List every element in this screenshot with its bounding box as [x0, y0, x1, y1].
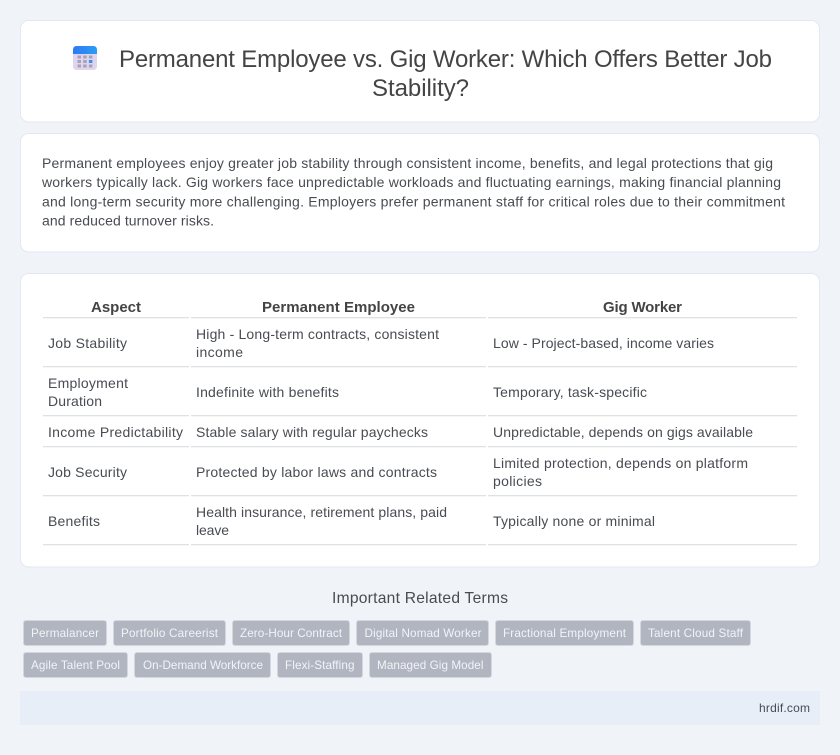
row: job security: Protected by labor laws and contracts	[196, 464, 437, 480]
tags: related terms: Digital Nomad Worker	[364, 627, 482, 640]
tags: related terms: On-Demand Workforce	[143, 659, 263, 672]
row: employment duration	[48, 375, 647, 409]
row: income predictability	[48, 424, 753, 440]
row: employment duration: Duration	[48, 393, 102, 409]
text block: introduction: workers typically lack. Gig workers face unpredictable workloads and fluctuating earnings, making financial planning	[41, 174, 781, 190]
tags: related terms: Fractional Employment	[503, 627, 627, 640]
row: job stability: Job Stability	[48, 335, 127, 351]
table header	[91, 299, 682, 316]
row: employment duration: Indefinite with benefits	[196, 384, 339, 400]
tags: related terms: Talent Cloud Staff	[648, 627, 744, 640]
row: benefits	[48, 504, 655, 538]
row: job stability: income	[196, 344, 243, 360]
table header: Aspect	[91, 299, 141, 316]
row: job stability: Low - Project-based, income varies	[493, 335, 714, 351]
row: benefits: Health insurance, retirement plans, paid	[196, 504, 447, 520]
panel: comparison table	[20, 274, 820, 567]
heading: important related terms: Important Related Terms	[332, 590, 508, 607]
tags: related terms: Agile Talent Pool	[31, 659, 120, 672]
text block: introduction	[41, 155, 785, 228]
text block: introduction: Permanent employees enjoy greater job stability through consistent income, benefits, and legal protections that gig	[42, 155, 773, 171]
table header: Gig Worker	[603, 299, 682, 316]
row: income predictability: Stable salary with regular paychecks	[196, 424, 428, 440]
row: job security: Limited protection, depends on platform	[493, 455, 748, 471]
title	[119, 46, 772, 102]
text block: introduction: and reduced turnover risks.	[42, 212, 214, 228]
panel: introduction	[20, 134, 820, 252]
text block: introduction: and long-term security more challenging. Employers prefer permanent staff for critical roles due to their commitment	[42, 194, 785, 210]
row: benefits: leave	[196, 522, 229, 538]
row: job stability: High - Long-term contracts, consistent	[196, 326, 439, 342]
row: job security	[48, 455, 748, 489]
icon: calendar	[73, 46, 97, 70]
tags: related terms: Managed Gig Model	[377, 659, 484, 672]
row: income predictability: Income Predictability	[48, 424, 183, 440]
row: job stability	[48, 326, 714, 360]
footer: hrdif.com	[759, 701, 810, 715]
row: income predictability: Unpredictable, depends on gigs available	[493, 424, 753, 440]
title: Stability?	[372, 75, 469, 102]
panel: header	[20, 20, 820, 122]
row: benefits: Benefits	[48, 513, 100, 529]
table header: Permanent Employee	[262, 299, 415, 316]
row: job security: policies	[493, 473, 542, 489]
tags: related terms: Zero-Hour Contract	[240, 627, 343, 640]
tags: related terms	[24, 620, 750, 678]
row: employment duration: Temporary, task-specific	[493, 384, 647, 400]
row: employment duration: Employment	[48, 375, 128, 391]
tags: related terms: Portfolio Careerist	[121, 627, 219, 640]
row: job security: Job Security	[48, 464, 127, 480]
tags: related terms: Permalancer	[31, 627, 99, 640]
title: Permanent Employee vs. Gig Worker: Which Offers Better Job	[119, 46, 772, 73]
footer	[20, 691, 820, 725]
tags: related terms: Flexi-Staffing	[285, 659, 354, 672]
row: benefits: Typically none or minimal	[493, 513, 655, 529]
